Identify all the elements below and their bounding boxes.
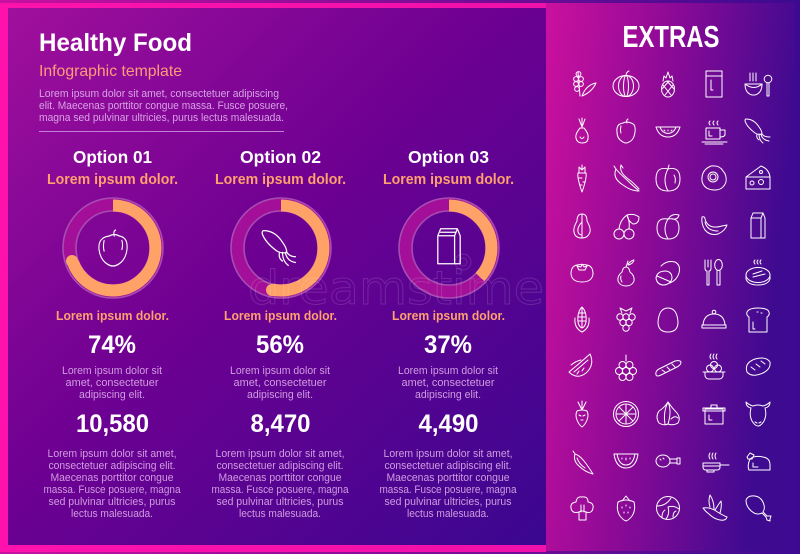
description: consectetuer adipiscing elit. <box>48 460 176 472</box>
icon: spaghetti <box>703 354 725 379</box>
icon: mango halves <box>656 262 680 285</box>
icon: cheese <box>746 166 770 189</box>
icon: chicken leg <box>746 496 771 521</box>
intro text: Lorem ipsum dolor sit amet, consectetuer adipiscing <box>39 88 279 100</box>
icon: chillies <box>614 165 639 191</box>
value 4,490: 4,490 <box>418 410 478 438</box>
icon grid <box>569 71 772 521</box>
icon: milk carton small <box>751 213 765 238</box>
heading: Option 02 <box>240 147 321 167</box>
icon: squid small <box>745 119 770 143</box>
intro text: elit. Maecenas porttitor congue massa. Fusce posuere, <box>39 100 288 112</box>
description <box>230 365 330 401</box>
heading: Option 01 <box>73 147 152 167</box>
icon: broccoli <box>571 497 593 520</box>
icon: pear <box>618 260 634 286</box>
icon: bull <box>746 402 770 426</box>
description: Maecenas porttitor congue <box>386 472 510 484</box>
subheading: Lorem ipsum dolor. <box>215 172 346 188</box>
description <box>44 448 181 520</box>
description: massa. Fusce posuere, magna <box>44 484 181 496</box>
icon: banana <box>702 217 727 234</box>
watermark: dreamstime <box>248 261 544 315</box>
description <box>62 365 162 401</box>
icon: fried egg <box>702 166 726 190</box>
icon: bread loaf <box>746 358 770 375</box>
icon: bread <box>747 308 769 332</box>
description: Lorem ipsum dolor sit <box>398 365 498 377</box>
intro text: magna sed pulvinar ultricies, purus lectus malesuada. <box>39 112 284 124</box>
subtitle: Infographic template <box>39 63 182 80</box>
subheading: Lorem ipsum dolor. <box>47 172 178 188</box>
label: Lorem ipsum dolor. <box>56 309 169 323</box>
icon: berries <box>616 355 636 380</box>
pink frame <box>0 3 546 552</box>
description <box>398 365 498 401</box>
description: Lorem ipsum dolor sit amet, <box>48 448 176 460</box>
icon: pot <box>703 405 725 424</box>
label: Lorem ipsum dolor. <box>392 309 505 323</box>
icon: pepper <box>617 119 635 143</box>
description: amet, consectetuer <box>234 377 327 389</box>
description: lectus malesuada. <box>71 508 153 520</box>
description: Lorem ipsum dolor sit amet, <box>384 448 512 460</box>
panel: option 01 <box>44 147 181 520</box>
icon: peach <box>657 214 679 239</box>
icon: squid <box>262 231 296 265</box>
description: massa. Fusce posuere, magna <box>212 484 349 496</box>
description: Maecenas porttitor congue <box>218 472 342 484</box>
icon: cabbage <box>656 496 680 520</box>
description <box>212 448 349 520</box>
icon: steak <box>746 260 770 285</box>
icon: tomato <box>571 264 593 282</box>
value 74%: 74% <box>88 331 136 359</box>
icon: egg <box>658 308 678 332</box>
description: Maecenas porttitor congue <box>50 472 174 484</box>
icon: grapes <box>617 308 635 331</box>
icon: milk carton <box>438 229 460 264</box>
description: adipiscing elit. <box>247 389 313 401</box>
icon: chicken <box>747 453 770 470</box>
icon: bowl and spoon <box>745 73 772 96</box>
panel: option 03 <box>380 147 517 520</box>
icon: cherries <box>614 214 639 239</box>
value 8,470: 8,470 <box>250 410 310 438</box>
icon: coffee cup <box>702 121 727 144</box>
icon: melon slice <box>656 127 680 137</box>
value 37%: 37% <box>424 331 472 359</box>
icon: pineapple <box>662 72 674 97</box>
panel: option 02 <box>212 147 349 520</box>
icon: beet <box>576 401 588 427</box>
icon: baguette <box>656 361 681 376</box>
description: sed pulvinar ultricies, purus <box>216 496 344 508</box>
icon: avocado <box>574 214 590 238</box>
description: massa. Fusce posuere, magna <box>380 484 517 496</box>
description: lectus malesuada. <box>239 508 321 520</box>
icon: chili <box>573 451 593 474</box>
icon: cloche <box>702 310 726 328</box>
description: Lorem ipsum dolor sit amet, <box>216 448 344 460</box>
description: adipiscing elit. <box>79 389 145 401</box>
panel: main <box>8 8 546 545</box>
heading: Option 03 <box>408 147 489 167</box>
description: adipiscing elit. <box>415 389 481 401</box>
icon: garlic <box>657 402 679 425</box>
description <box>380 448 517 520</box>
description: sed pulvinar ultricies, purus <box>384 496 512 508</box>
icon: wheat <box>574 72 596 96</box>
icon: pumpkin <box>613 71 639 96</box>
heading: extras: EXTRAS <box>622 19 720 54</box>
icon: watermelon <box>614 454 638 468</box>
icon: sprouting bean <box>703 495 727 520</box>
label: Lorem ipsum dolor. <box>224 309 337 323</box>
description: consectetuer adipiscing elit. <box>384 460 512 472</box>
icon: glass <box>706 71 722 97</box>
title: Healthy Food <box>39 29 192 57</box>
description: consectetuer adipiscing elit. <box>216 460 344 472</box>
description: sed pulvinar ultricies, purus <box>48 496 176 508</box>
icon: peas <box>569 354 592 376</box>
description: Lorem ipsum dolor sit <box>62 365 162 377</box>
icon: plum <box>656 165 680 191</box>
icon: frying pan <box>703 453 729 472</box>
donut chart 74% <box>63 198 163 298</box>
panel: extras background <box>546 3 795 551</box>
subheading: Lorem ipsum dolor. <box>383 172 514 188</box>
value 10,580: 10,580 <box>76 410 149 438</box>
donut chart 56% <box>231 198 331 298</box>
value 56%: 56% <box>256 331 304 359</box>
donut chart 37% <box>399 198 499 298</box>
icon: carrot <box>578 165 586 192</box>
icon: strawberry <box>617 496 635 521</box>
intro text <box>39 88 288 124</box>
description: amet, consectetuer <box>66 377 159 389</box>
description: Lorem ipsum dolor sit <box>230 365 330 377</box>
icon: drumstick small <box>656 455 680 467</box>
icon: onion <box>576 118 588 143</box>
icon: bell pepper <box>99 230 127 266</box>
description: lectus malesuada. <box>407 508 489 520</box>
icon: fork and spoon <box>705 260 722 285</box>
icon: corn <box>575 307 589 332</box>
icon: citrus <box>614 402 638 426</box>
description: amet, consectetuer <box>402 377 495 389</box>
